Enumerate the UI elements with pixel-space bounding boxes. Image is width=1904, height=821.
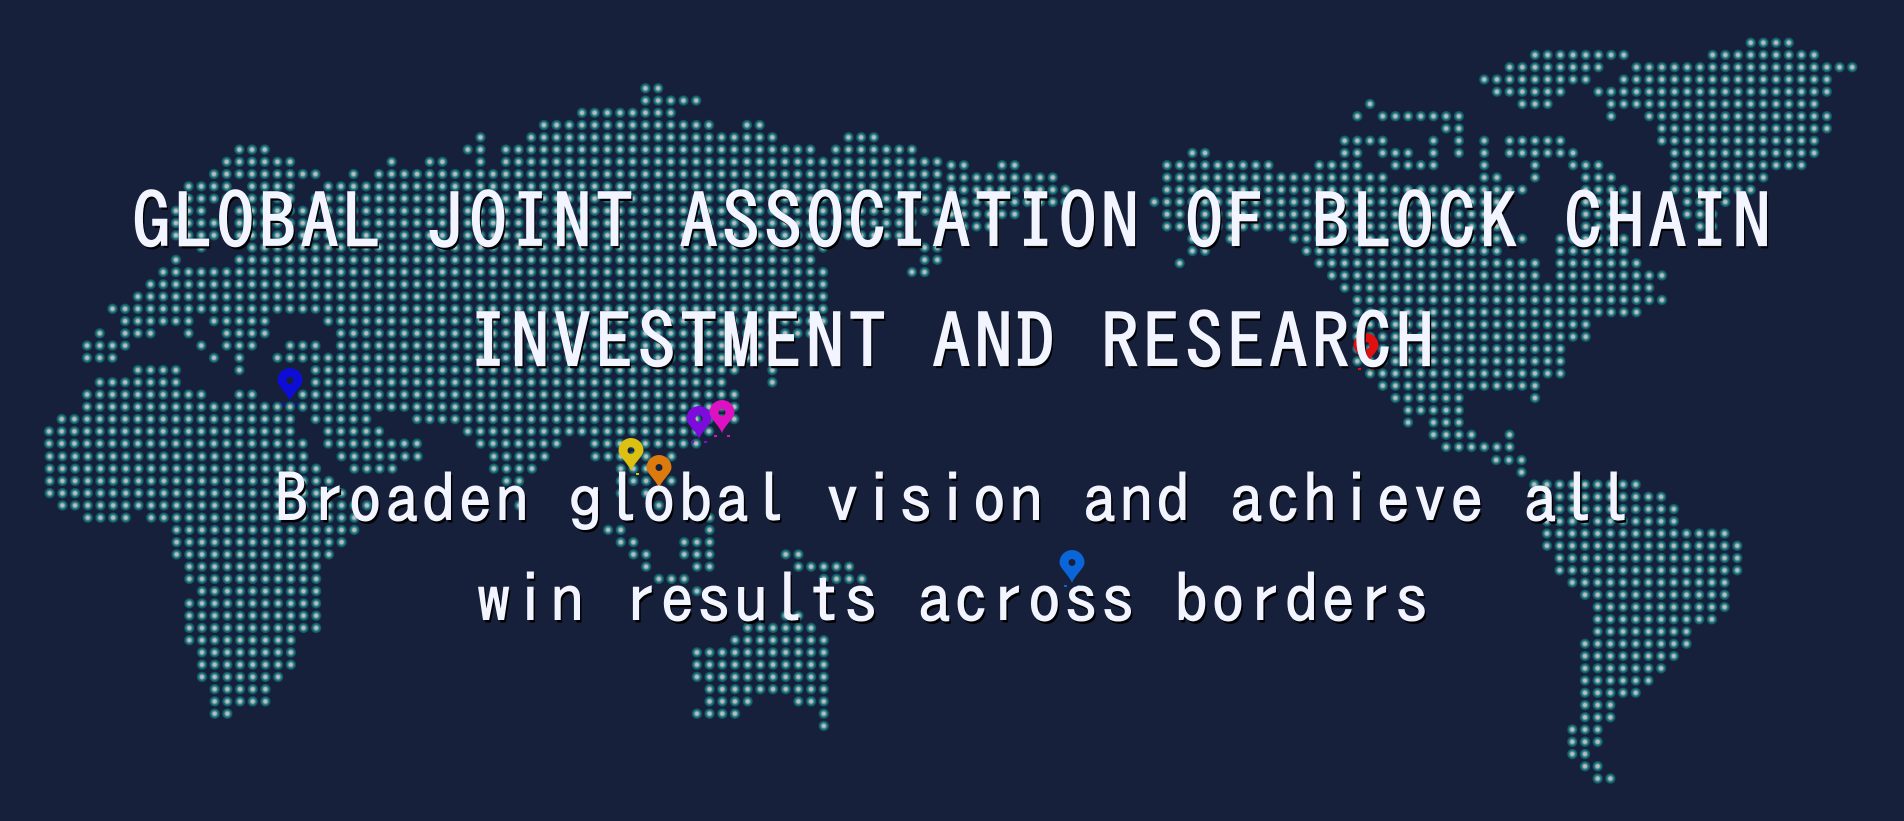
dots: eastern landmass, upper rows xyxy=(945,37,1859,453)
icon: red map pin xyxy=(1354,333,1378,370)
icon: blue map pin xyxy=(278,368,302,405)
icon: azure map pin xyxy=(1060,550,1084,587)
dots: western landmass, upper rows xyxy=(43,82,944,450)
dots: western landmass, lower rows xyxy=(43,450,868,732)
subtitle line 2: win results across borders xyxy=(477,564,1431,632)
subtitle line 1: Broaden global vision and achieve all xyxy=(275,464,1633,532)
dots: eastern landmass, lower rows xyxy=(1490,454,1744,785)
title line 1: GLOBAL JOINT ASSOCIATION OF BLOCK CHAIN xyxy=(132,183,1775,259)
icon: orange map pin xyxy=(646,455,672,492)
icon: magenta map pin xyxy=(710,400,734,437)
icon: yellow map pin xyxy=(618,438,644,475)
icon: purple map pin xyxy=(686,406,712,443)
title line 2: INVESTMENT AND RESEARCH xyxy=(469,303,1438,379)
